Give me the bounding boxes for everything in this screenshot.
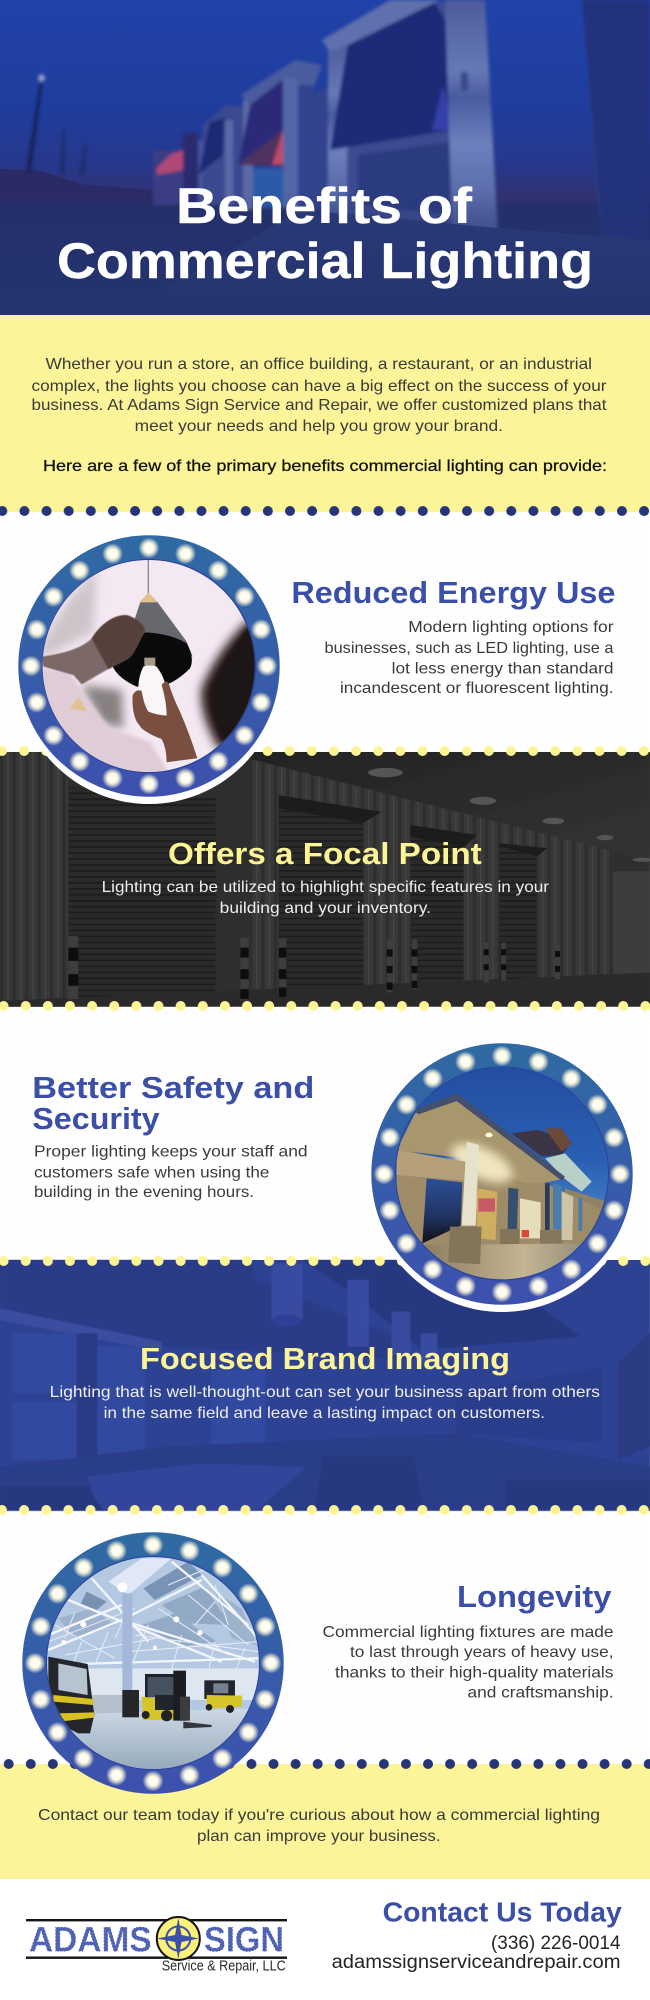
body text: and craftsmanship.	[468, 1684, 614, 1702]
lit ring photo: warehouse forklifts	[22, 1532, 284, 1794]
lead-in line: Here are a few of the primary benefits commercial lighting can provide:	[43, 458, 607, 475]
body text	[324, 619, 614, 697]
panel: header	[0, 0, 650, 315]
intro text: business. At Adams Sign Service and Repair, we offer customized plans that	[32, 397, 607, 414]
intro text: meet your needs and help you grow your brand.	[135, 418, 503, 435]
title: Commercial Lighting	[57, 233, 593, 289]
heading: better safety and security: Security	[32, 1101, 160, 1136]
phone number: (336) 226-0014	[491, 1933, 621, 1954]
intro text: complex, the lights you choose can have a big effect on the success of your	[32, 378, 607, 395]
closing text: plan can improve your business.	[197, 1828, 441, 1845]
body text: thanks to their high-quality materials	[335, 1665, 614, 1682]
body text: incandescent or fluorescent lighting.	[340, 680, 614, 697]
panel: better safety and security	[32, 1070, 314, 1201]
panel: longevity	[322, 1579, 614, 1702]
panel: footer	[26, 1897, 622, 1975]
closing text: Contact our team today if you're curious about how a commercial lighting	[38, 1807, 600, 1824]
lit ring photo: hands changing bulb	[18, 535, 280, 804]
website: adamssignserviceandrepair.com	[332, 1952, 620, 1973]
body text: building and your inventory.	[220, 900, 431, 917]
heading: longevity: Longevity	[457, 1579, 612, 1614]
icon: compass	[157, 1917, 200, 1960]
closing text	[38, 1807, 600, 1845]
lit ring photo: storefront at night	[365, 1035, 645, 1315]
panel: offers a focal point	[0, 752, 650, 1007]
logo: adams sign service and repair: ADAMS	[29, 1920, 152, 1960]
body text	[102, 879, 550, 917]
body text: businesses, such as LED lighting, use a	[324, 640, 614, 657]
title: Benefits of	[176, 178, 472, 234]
body text: Commercial lighting fixtures are made	[322, 1624, 614, 1641]
title	[57, 178, 593, 289]
logo: adams sign service and repair: Service & Repair, LLC	[162, 1958, 286, 1975]
body text	[322, 1624, 614, 1702]
body text: Proper lighting keeps your staff and	[34, 1144, 308, 1160]
logo: adams sign service and repair: SIGN	[204, 1920, 284, 1960]
body text: to last through years of heavy use,	[350, 1644, 614, 1661]
body text: customers safe when using the	[34, 1164, 270, 1181]
header photo: storefront at dusk	[0, 0, 650, 315]
body text: Lighting that is well-thought-out can set your business apart from others	[50, 1384, 600, 1401]
body text	[50, 1384, 600, 1422]
heading: offers a focal point: Offers a Focal Point	[168, 836, 482, 871]
warehouse photo	[0, 752, 650, 1007]
heading: better safety and security: Better Safety and	[32, 1070, 314, 1105]
body text: lot less energy than standard	[392, 660, 614, 677]
body text: Lighting can be utilized to highlight specific features in your	[102, 879, 550, 896]
heading: better safety and security	[32, 1070, 314, 1136]
logo: adams sign service and repair	[26, 1917, 287, 1975]
body text: building in the evening hours.	[34, 1184, 254, 1201]
body text: Modern lighting options for	[408, 619, 614, 636]
intro text: Whether you run a store, an office building, a restaurant, or an industrial	[46, 356, 592, 373]
body text	[34, 1144, 308, 1201]
panel: introduction	[0, 315, 650, 512]
heading: focused brand imaging: Focused Brand Imaging	[140, 1341, 510, 1376]
restaurant photo	[0, 1260, 650, 1511]
body text: in the same field and leave a lasting impact on customers.	[104, 1405, 545, 1422]
contact heading: Contact Us Today	[383, 1897, 622, 1928]
panel: closing call to action	[0, 1764, 650, 1879]
panel: focused brand imaging	[0, 1260, 650, 1511]
intro text	[32, 356, 607, 435]
panel: reduced energy use	[10, 525, 615, 805]
heading: reduced energy use: Reduced Energy Use	[291, 575, 615, 610]
